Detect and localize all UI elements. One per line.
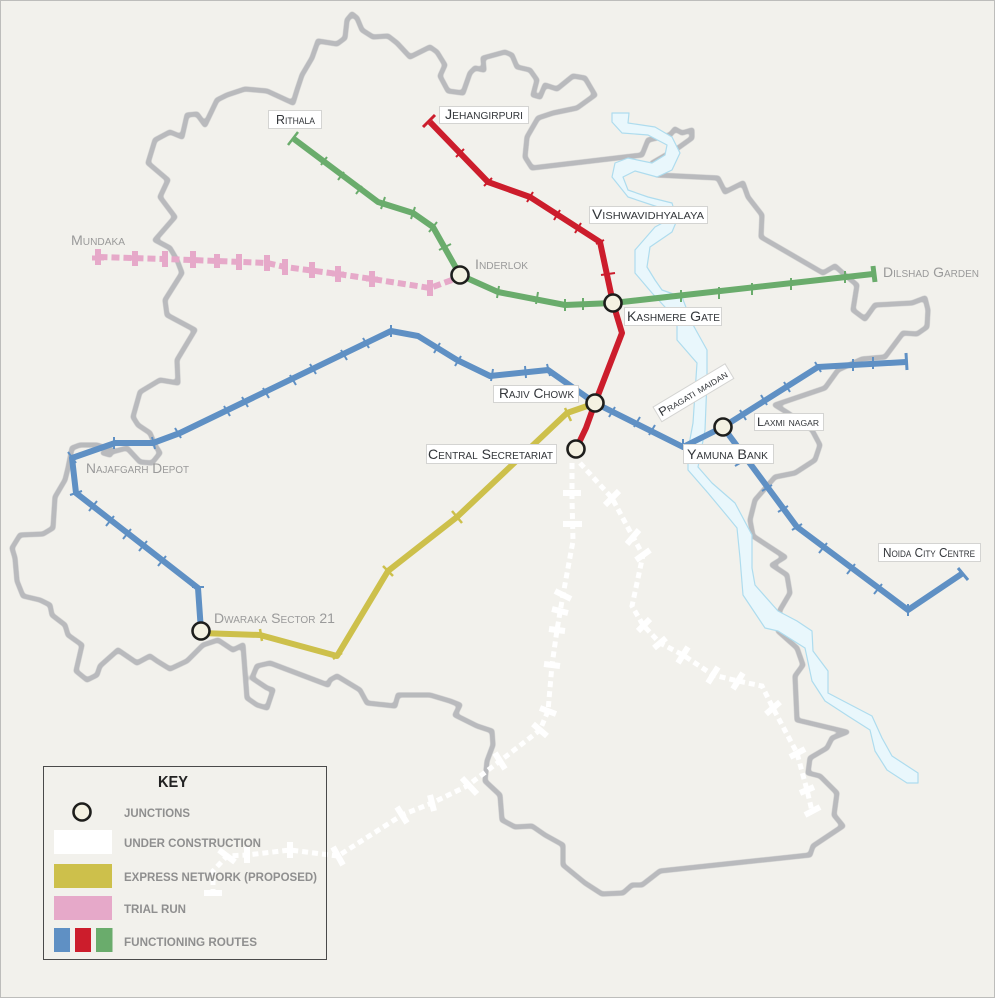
junction: Central Secretariat	[568, 440, 584, 458]
key: under construction text: UNDER CONSTRUCTION	[124, 836, 261, 850]
key: junction symbol	[74, 804, 90, 820]
key: express text: EXPRESS NETWORK (PROPOSED)	[124, 870, 317, 884]
red functioning route	[423, 115, 622, 449]
label: Rithala: Rithala	[276, 112, 315, 127]
label: Vishwavidhyalaya: Vishwavidhyalaya	[592, 206, 704, 222]
label: Inderlok: Inderlok	[475, 256, 528, 272]
label: Laxmi Nagar	[754, 414, 824, 430]
junction: Rajiv Chowk	[586, 394, 604, 412]
label: Noida City Centre: Noida City Centre	[883, 545, 975, 560]
label: Dwaraka Sector 21: Dwaraka Sector 21	[214, 610, 335, 626]
key: green swatch	[96, 928, 112, 952]
key: functioning routes text: FUNCTIONING ROUTES	[124, 935, 257, 949]
label: Laxmi Nagar: Laxmi nagar	[757, 415, 819, 429]
junction: Kashmere Gate	[604, 294, 622, 312]
river Yamuna	[612, 113, 918, 783]
label: Rithala	[268, 110, 322, 128]
key: blue swatch	[54, 928, 70, 952]
label: Rajiv Chowk: Rajiv Chowk	[499, 385, 574, 401]
label: Dilshad Garden: Dilshad Garden	[883, 264, 979, 280]
junction: Inderlok	[452, 266, 468, 284]
label: Yamuna Bank: Yamuna Bank	[687, 446, 768, 462]
junction: Laxmi Nagar	[714, 418, 732, 436]
blue functioning route west	[68, 325, 595, 631]
express network line	[201, 405, 590, 659]
under construction line: Central Secretariat to south-west	[204, 463, 582, 893]
trial run line (Mundaka)	[92, 249, 452, 296]
under construction line: Central Secretariat to south-east	[580, 463, 820, 815]
label: Mundaka: Mundaka	[71, 232, 125, 248]
label: Pragati Maidan: Pragati maidan	[656, 367, 730, 419]
key: express swatch	[54, 864, 112, 888]
green functioning route	[288, 132, 875, 311]
key heading: KEY	[158, 774, 188, 791]
key: trial run text: TRIAL RUN	[124, 902, 186, 916]
label: Najafgarh Depot: Najafgarh Depot	[86, 460, 189, 476]
label: Central Secretariat: Central Secretariat	[428, 446, 553, 462]
key: red swatch	[75, 928, 91, 952]
key: under construction swatch	[54, 830, 112, 854]
key: junctions text: JUNCTIONS	[124, 806, 190, 820]
junction: Dwaraka Sector 21	[192, 622, 210, 640]
key: trial run swatch	[54, 896, 112, 920]
blue functioning route east	[595, 353, 968, 616]
key panel	[44, 766, 326, 960]
label: Jehangirpuri: Jehangirpuri	[445, 106, 523, 122]
label: Kashmere Gate: Kashmere Gate	[627, 308, 720, 324]
